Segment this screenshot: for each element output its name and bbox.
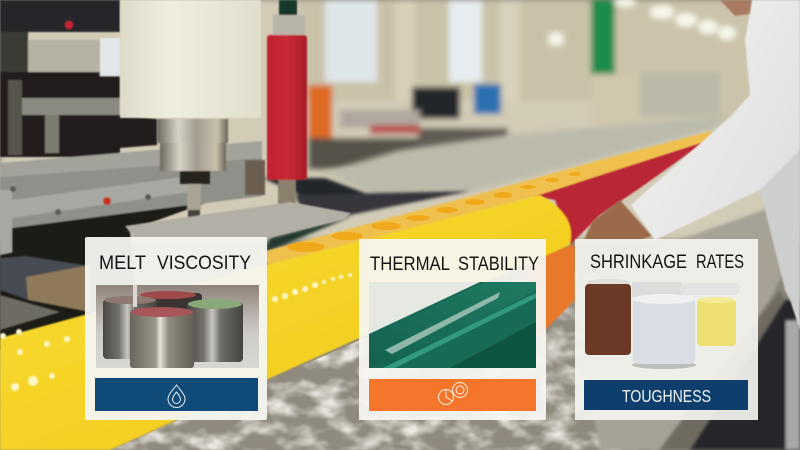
color bar [95,378,258,411]
orange strip [530,245,575,345]
heading: RATES [696,252,744,273]
card panel [359,239,546,420]
heading: VISCOSITY [157,253,251,274]
dark lower machine area [0,230,135,350]
heading: THERMAL [370,253,450,275]
card: melt viscosity [85,237,267,420]
color bar [369,379,536,411]
color bar with label [584,380,748,410]
left blocks [0,256,90,330]
heading: SHRINKAGE [590,252,687,273]
background: conveyor surface [325,115,730,197]
photo: polymer cylinders [585,279,740,369]
heading: MELT [99,253,146,274]
worker hand [584,200,652,240]
background: machine on the left [0,0,265,260]
photo: green and white sheets [369,282,536,368]
heading: STABILITY [458,253,539,275]
icon: two rings [438,382,468,404]
worker lab coat [631,0,800,330]
card panel [85,237,267,420]
concrete table [100,200,800,450]
dark floor right [690,300,800,450]
card: shrinkage rates [575,239,758,420]
white cylinder [120,0,261,118]
metal plate [125,202,351,238]
red tube section [530,135,714,245]
perforated top strip [262,131,712,268]
label: toughness: TOUGHNESS [622,386,711,406]
yellow tube [0,172,581,450]
heading [370,253,539,275]
card panel [575,239,758,420]
steel spindle [157,119,228,226]
icon: water drop [168,385,185,408]
background: factory wall [0,0,800,240]
card: thermal stability [359,239,546,420]
photo: metal cans [96,285,259,368]
background: dark conveyor edge [263,178,470,252]
heading [99,253,251,274]
red roller [267,0,307,210]
